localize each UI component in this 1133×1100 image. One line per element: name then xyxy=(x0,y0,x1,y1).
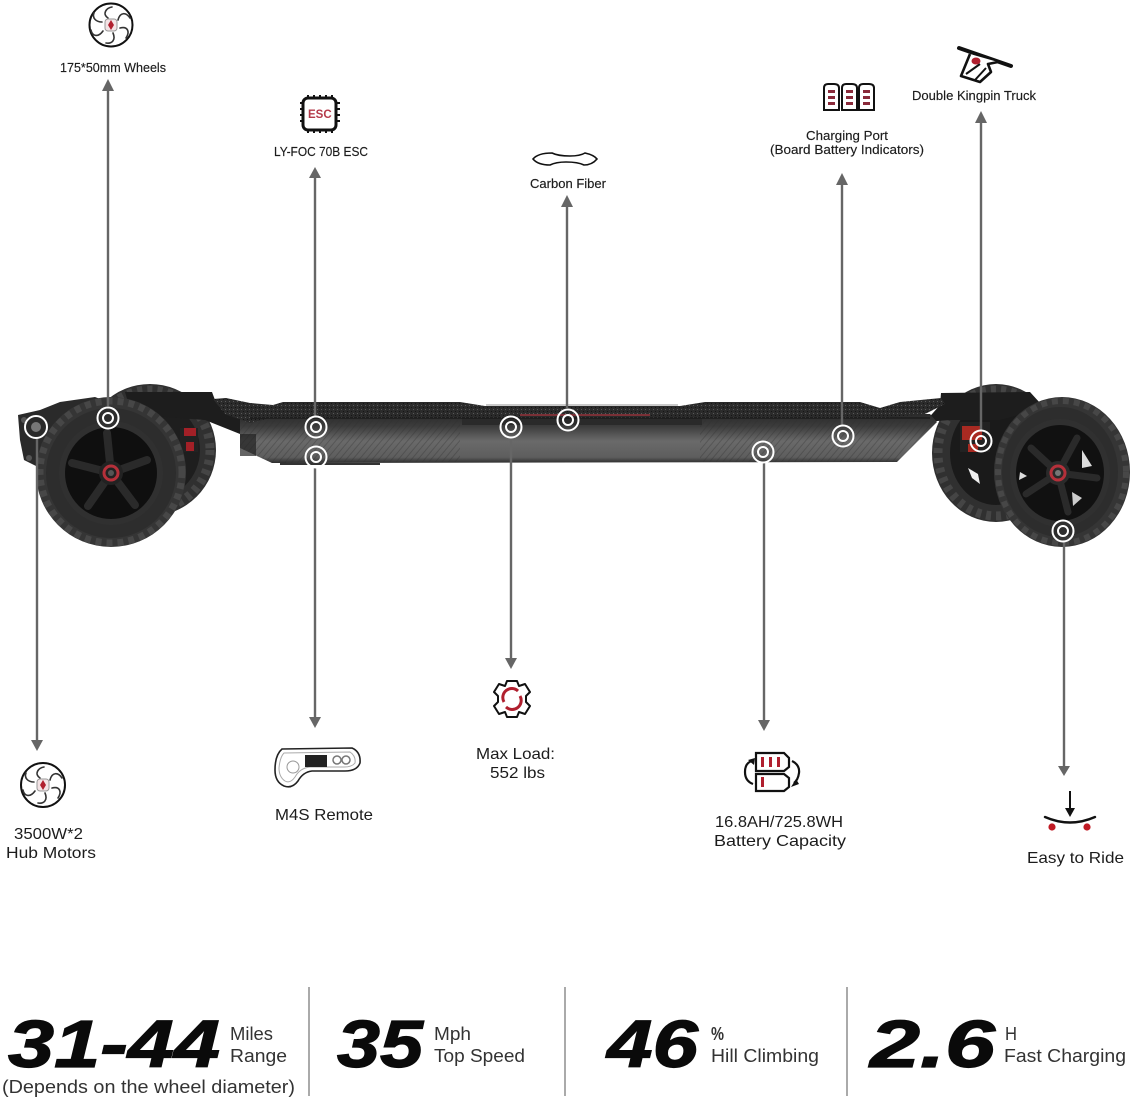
stat: range xyxy=(2,1007,295,1097)
right front wheel xyxy=(994,397,1130,547)
arrow: easy to ride xyxy=(1058,542,1070,776)
label: charging port xyxy=(770,129,924,157)
stat: fast charging: H xyxy=(1005,1024,1017,1044)
rear-side right wheel xyxy=(932,384,1060,522)
stat: fast charging: Fast Charging xyxy=(1004,1046,1126,1066)
arrow: truck xyxy=(975,111,987,430)
marker points xyxy=(25,408,1074,542)
stat: hill climbing: Hill Climbing xyxy=(711,1046,819,1066)
label: truck: Double Kingpin Truck xyxy=(912,89,1037,103)
arrow: carbon fiber xyxy=(561,195,573,408)
stat: fast charging: 2.6 xyxy=(867,1007,996,1082)
icon: carbon fiber deck xyxy=(533,153,597,165)
arrow: remote xyxy=(309,468,321,728)
label: ESC: LY-FOC 70B ESC xyxy=(274,145,368,159)
icon: remote xyxy=(275,748,360,787)
stat: range: (Depends on the wheel diameter) xyxy=(2,1077,295,1097)
label: max load: Max Load: xyxy=(476,746,555,763)
right truck xyxy=(925,392,1040,452)
stat: top speed xyxy=(337,1007,525,1082)
stat: top speed: 35 xyxy=(337,1007,425,1082)
skateboard xyxy=(18,384,1130,547)
stat: hill climbing: 46 xyxy=(605,1007,699,1082)
icon: ESC chip: ESC xyxy=(308,109,332,121)
label: remote: M4S Remote xyxy=(275,807,373,824)
arrow: ESC xyxy=(309,167,321,416)
label: max load xyxy=(476,746,555,782)
arrow: hub motors xyxy=(31,438,43,751)
arrow: battery xyxy=(758,463,770,731)
icon: gear load xyxy=(494,681,530,717)
label: charging port: (Board Battery Indicators) xyxy=(770,143,924,157)
icon: charging port batteries xyxy=(824,84,874,110)
icon: truck xyxy=(959,48,1011,82)
stat: hill climbing: % xyxy=(711,1024,724,1044)
label: battery xyxy=(714,814,846,850)
left truck xyxy=(125,392,273,452)
rear-side left wheel xyxy=(84,384,216,516)
stat: range: Miles xyxy=(230,1024,273,1044)
label: hub motors xyxy=(6,826,96,862)
label: easy to ride: Easy to Ride xyxy=(1027,850,1124,867)
label: battery: 16.8AH/725.8WH xyxy=(715,814,843,831)
label: wheels: 175*50mm Wheels xyxy=(60,61,166,75)
label: max load: 552 lbs xyxy=(490,765,545,782)
icon: battery swap xyxy=(745,753,799,791)
icon: wheel xyxy=(90,4,132,46)
label: hub motors: 3500W*2 xyxy=(14,826,83,843)
stat: range: Range xyxy=(230,1046,287,1066)
label: battery: Battery Capacity xyxy=(714,833,846,850)
stat: top speed: Top Speed xyxy=(434,1046,525,1066)
label: charging port: Charging Port xyxy=(806,129,889,143)
icon: ESC chip xyxy=(300,95,340,133)
left front wheel xyxy=(36,397,186,547)
label: carbon fiber: Carbon Fiber xyxy=(530,177,606,191)
arrow: charging port xyxy=(836,173,848,425)
stat: top speed: Mph xyxy=(434,1024,471,1044)
icon: hub motor xyxy=(21,763,65,807)
label: hub motors: Hub Motors xyxy=(6,845,96,862)
grip deck xyxy=(213,398,945,423)
battery enclosure xyxy=(240,414,937,465)
left motor mount xyxy=(18,397,108,466)
icon: easy to ride xyxy=(1045,791,1095,831)
stat: fast charging xyxy=(867,1007,1126,1082)
arrow: max load xyxy=(505,438,517,669)
stat: range: 31-44 xyxy=(8,1007,220,1082)
stat: hill climbing xyxy=(605,1007,819,1082)
arrow: wheels xyxy=(102,79,114,406)
